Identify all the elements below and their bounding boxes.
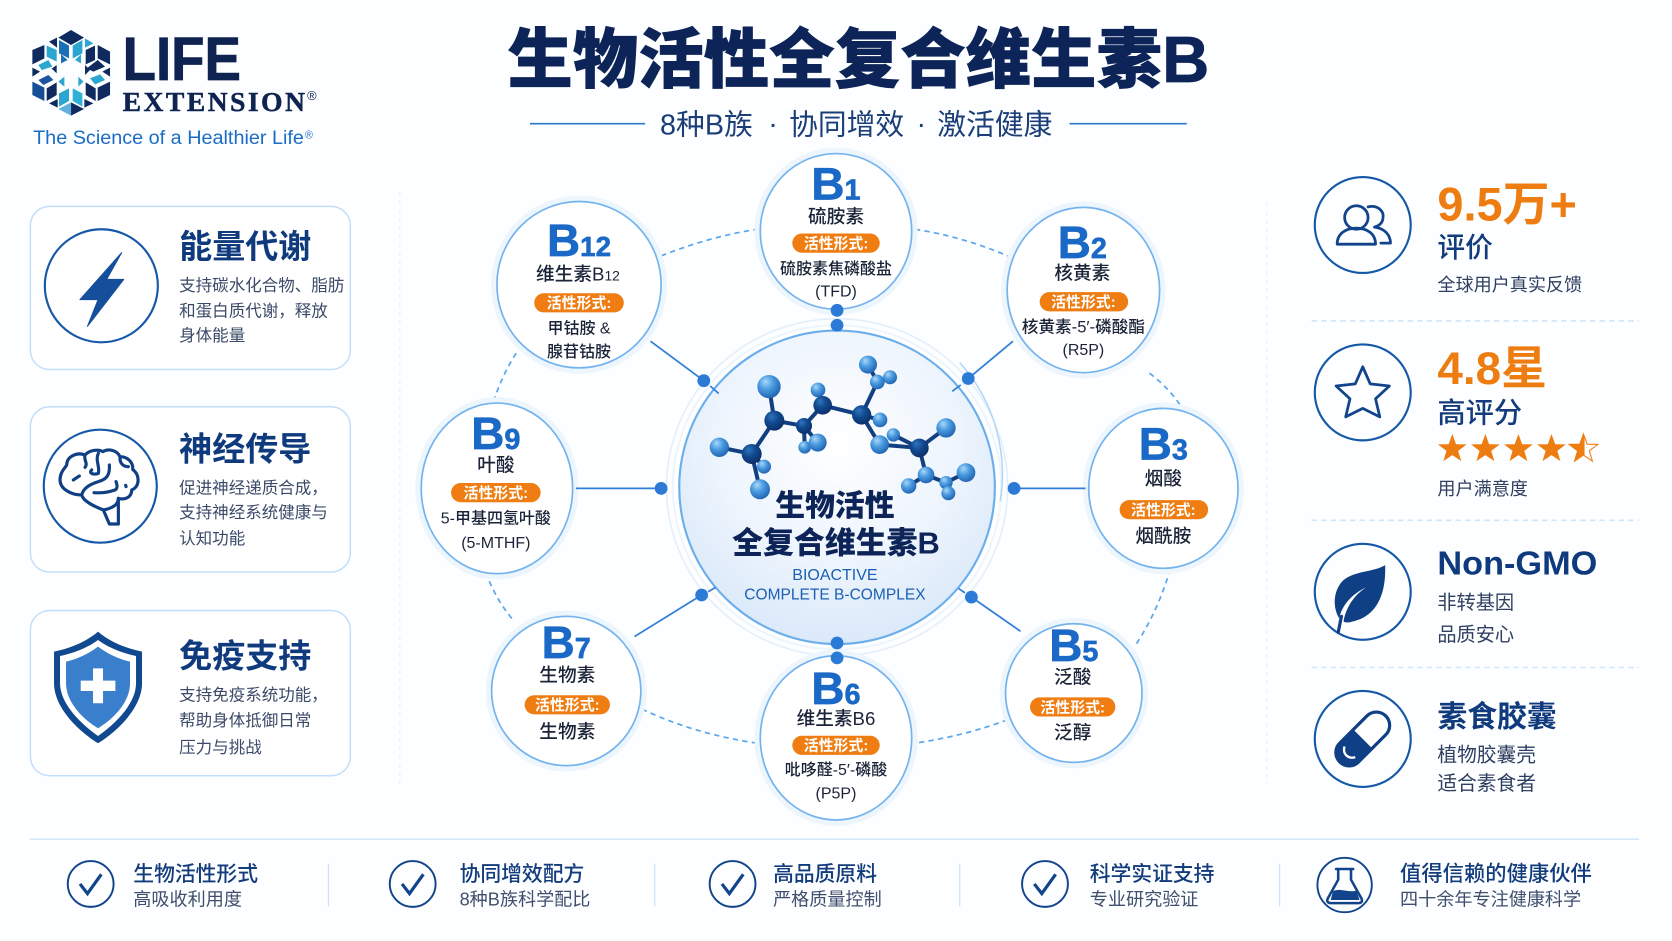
subtitle: 8种B族 (660, 109, 753, 141)
vitamin B12 (494, 198, 664, 371)
stat: non-GMO (1315, 544, 1597, 646)
feature title: 值得信赖的健康伙伴 (1400, 862, 1592, 886)
five star rating (1438, 434, 1598, 461)
caption: 植物胶囊壳 (1437, 744, 1536, 766)
icon: flask (1317, 858, 1372, 912)
panel: centre hub (666, 319, 1008, 656)
vitamin B9: 叶酸 (477, 454, 515, 475)
text block: 支持碳水化合物、脂肪 (179, 276, 344, 295)
icon: check (1022, 861, 1068, 907)
feature: premium ingredients (710, 861, 882, 909)
text block: 认知功能 (179, 529, 245, 548)
tagline: The Science of a Healthier Life (33, 128, 304, 149)
text block: 身体能量 (179, 326, 245, 345)
heading: 神经传导 (179, 432, 311, 469)
vitamin B12: B12 (547, 214, 611, 266)
icon: brain (44, 430, 157, 543)
label: 高评分 (1437, 396, 1522, 428)
text block: 帮助身体抵御日常 (179, 711, 311, 730)
caption: 全球用户真实反馈 (1437, 275, 1582, 295)
vitamin B7: 生物素 (539, 664, 595, 685)
icon: shield with cross (54, 632, 142, 743)
icon: check (710, 861, 755, 907)
vitamin B2: 核黄素-5′-磷酸酯 (1022, 318, 1145, 337)
feature caption: 严格质量控制 (773, 889, 882, 909)
vitamin B2 (1004, 204, 1163, 376)
panel: energy metabolism card (30, 206, 350, 369)
vitamin B3 (1086, 405, 1241, 572)
hub heading line 2: 全复合维生素B (732, 525, 940, 560)
feature title: 科学实证支持 (1090, 863, 1215, 886)
vitamin B6: (P5P) (816, 786, 856, 803)
subtitle: 协同增效 (789, 109, 904, 141)
vitamin B2: B2 (1058, 216, 1107, 268)
caption: 非转基因 (1437, 592, 1514, 614)
text block: 促进神经递质合成， (179, 479, 328, 498)
feature caption: 专业研究验证 (1090, 889, 1198, 909)
registered mark: ® (307, 88, 317, 103)
feature caption: 四十余年专注健康科学 (1400, 889, 1581, 909)
vitamin B12: 活性形式: (547, 295, 611, 312)
vitamin B5: B5 (1049, 619, 1098, 671)
label: 评价 (1437, 232, 1493, 263)
stat: vegetarian capsule (1315, 691, 1557, 795)
hub heading: 生物活性 (775, 490, 895, 523)
tagline registered mark: ® (305, 130, 313, 142)
vitamin B9: B9 (471, 407, 520, 459)
connectors from centre to vitamins (576, 304, 1086, 664)
vitamin B3: 烟酰胺 (1135, 526, 1191, 547)
heading: 免疫支持 (179, 638, 311, 675)
subtitle: 激活健康 (937, 109, 1052, 141)
feature title: 高品质原料 (773, 863, 877, 886)
vitamin B2: (R5P) (1063, 342, 1104, 359)
vitamin B6 (757, 653, 915, 823)
big number: 4.8星 (1437, 342, 1547, 394)
text block: 支持神经系统健康与 (179, 503, 328, 522)
vitamin B7: B7 (542, 616, 591, 668)
vitamin B6: 吡哆醛-5′-磷酸 (785, 761, 887, 779)
vitamin B1: 硫胺素 (808, 206, 864, 227)
caption line 2: 品质安心 (1437, 624, 1514, 646)
feature title: 生物活性形式 (133, 863, 258, 886)
feature: trusted partner (1317, 858, 1592, 912)
vitamin B3: 烟酸 (1145, 468, 1182, 489)
panel: immune support card (30, 610, 350, 776)
panel: nerve conduction card (30, 407, 350, 572)
feature: synergy formula (390, 861, 590, 909)
hub english label: BIOACTIVE (792, 567, 878, 584)
text block: 支持免疫系统功能， (179, 686, 328, 705)
stat: reviews (1315, 177, 1582, 295)
dashed ring between vitamins (487, 229, 1184, 743)
caption: 用户满意度 (1437, 479, 1528, 499)
text block: 和蛋白质代谢，释放 (179, 302, 328, 321)
vitamin B2: 活性形式: (1051, 294, 1116, 311)
big number: 9.5万+ (1437, 179, 1577, 231)
vitamin B7: 活性形式: (535, 697, 600, 714)
heading: 素食胶囊 (1437, 701, 1557, 734)
vitamin B9: 活性形式: (464, 485, 528, 502)
vitamin B3: 活性形式: (1131, 502, 1196, 519)
feature: science backed (1022, 861, 1215, 909)
vitamin B1: (TFD) (815, 283, 857, 300)
heading: 能量代谢 (179, 229, 311, 266)
vitamin B12: 腺苷钴胺 (547, 343, 611, 361)
feature caption: 8种B族科学配比 (460, 889, 590, 909)
vitamin B2: 核黄素 (1054, 262, 1110, 283)
stat: rating (1315, 342, 1598, 499)
vitamin B5: 活性形式: (1040, 699, 1105, 716)
logo wordmark LIFE: LIFE (123, 25, 241, 93)
vitamin B7 (488, 613, 644, 769)
vitamin B5 (1002, 619, 1145, 766)
icon: check (68, 861, 114, 907)
vitamin B3: B3 (1139, 418, 1188, 470)
heading: Non-GMO (1437, 546, 1597, 583)
feature title: 协同增效配方 (460, 863, 584, 886)
vitamin B1: 硫胺素焦磷酸盐 (780, 260, 892, 278)
subtitle (530, 108, 1187, 141)
icon: star outline (1315, 344, 1411, 440)
icon: hexagon snowflake mark (32, 30, 110, 116)
vitamin B9 (418, 400, 576, 577)
icon: capsule (1315, 691, 1411, 787)
icon: lightning bolt (45, 229, 158, 342)
vitamin B1 (757, 150, 915, 312)
caption line 2: 适合素食者 (1437, 773, 1536, 795)
vitamin B12: 甲钴胺 & (547, 320, 611, 338)
vitamin B6: 维生素B6 (797, 708, 875, 729)
feature caption: 高吸收利用度 (133, 889, 242, 909)
icon: leaf (1315, 544, 1411, 640)
vitamin B7: 生物素 (539, 721, 595, 742)
molecule (710, 356, 975, 500)
subtitle: · (768, 108, 778, 140)
text block: 压力与挑战 (179, 738, 262, 757)
vitamin B6: B6 (811, 662, 861, 714)
vitamin B1: B1 (811, 157, 861, 209)
vitamin B12: 维生素B12 (536, 263, 620, 284)
vitamin B6: 活性形式: (804, 738, 868, 755)
subtitle: · (917, 108, 926, 140)
title: 生物活性全复合维生素B (508, 23, 1209, 96)
vitamin B5: 泛醇 (1054, 722, 1091, 743)
feature: bioactive form (68, 861, 258, 909)
vitamin B9: 5-甲基四氢叶酸 (441, 509, 551, 528)
icon: check (390, 861, 436, 907)
vitamin B5: 泛酸 (1054, 666, 1092, 687)
icon: people (1315, 177, 1411, 273)
logo wordmark EXTENSION: EXTENSION (123, 86, 305, 117)
logo: Life Extension (32, 25, 317, 149)
hub english label line 2: COMPLETE B-COMPLEX (744, 586, 926, 603)
vitamin B1: 活性形式: (804, 235, 868, 252)
vitamin B9: (5-MTHF) (461, 535, 530, 552)
